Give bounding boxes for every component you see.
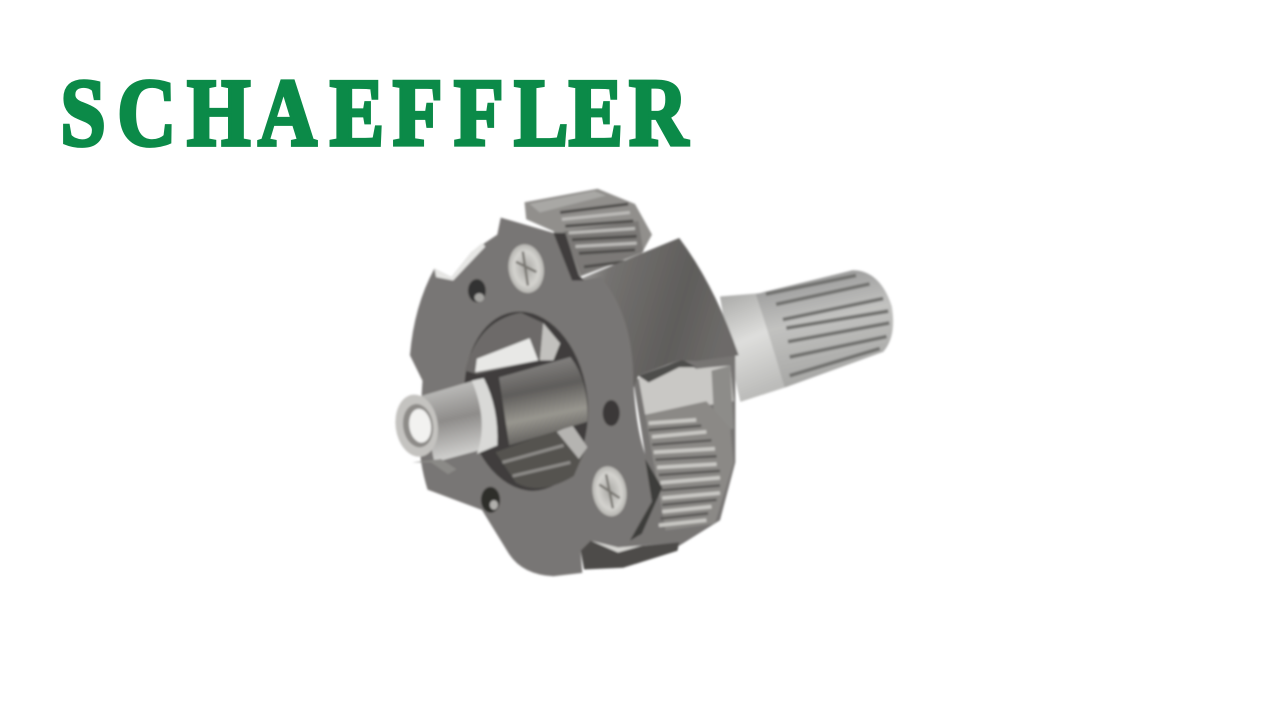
- lower planet gear and cage: [618, 350, 735, 547]
- logo: SCHAEFFLER wordmark: SCHAEFFLER: [60, 61, 689, 167]
- carrier plate: [410, 218, 662, 576]
- lower screw: [589, 464, 630, 519]
- centre opening: [453, 303, 599, 499]
- bottom clip: [581, 541, 679, 570]
- top planet gear: [524, 189, 652, 277]
- illustration: planetary gear assembly: [391, 189, 893, 576]
- bolt holes: [468, 279, 620, 513]
- output shaft with splines: [720, 270, 893, 402]
- carrier drum: [581, 238, 739, 401]
- upper screw: [505, 242, 547, 295]
- input shaft: [391, 357, 588, 474]
